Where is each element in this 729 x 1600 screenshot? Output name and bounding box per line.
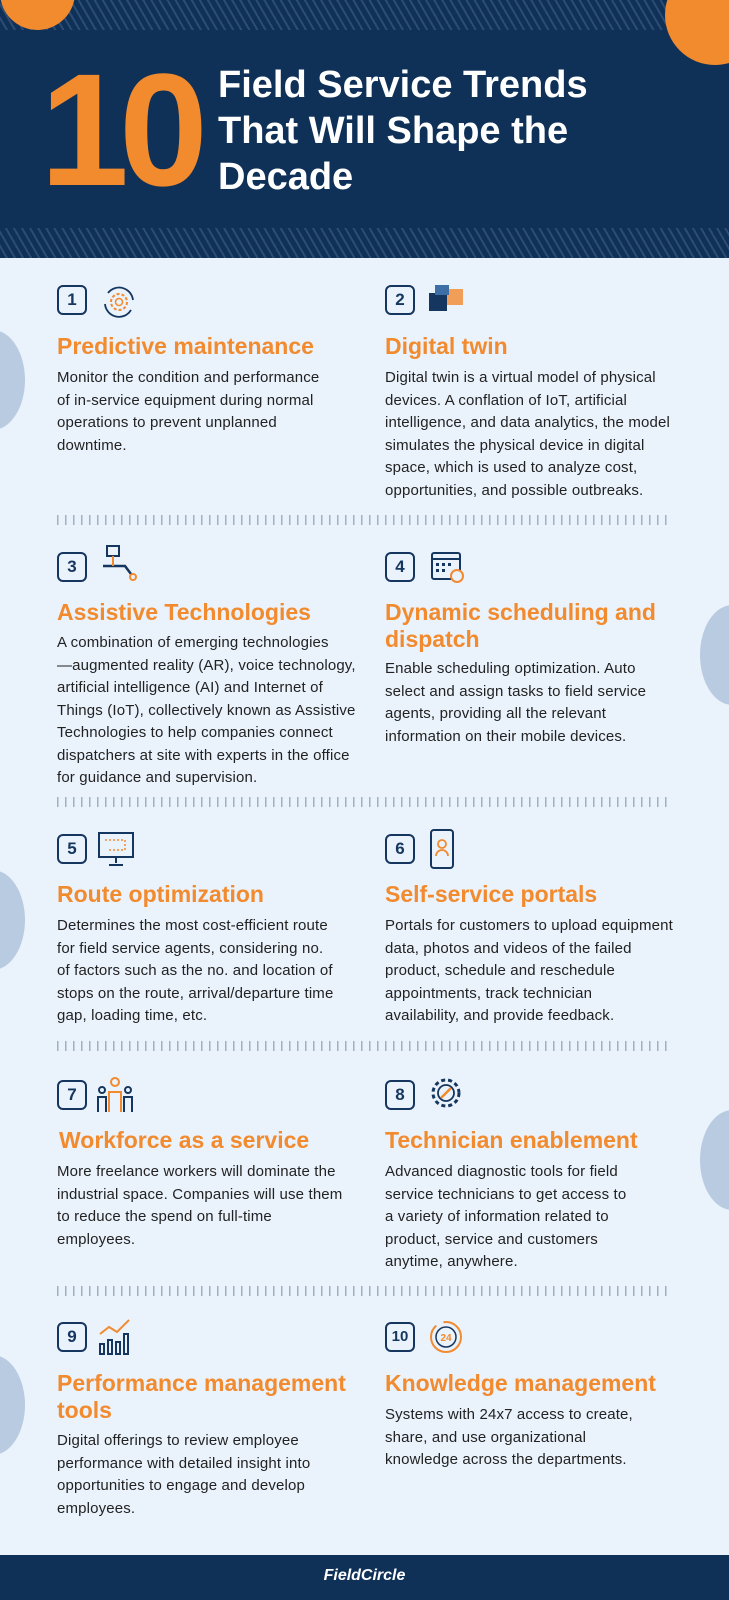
- item 6: product, schedule and reschedule: [385, 962, 615, 979]
- item 4: 4: [395, 557, 405, 576]
- icon: 24h: 24: [440, 1333, 452, 1344]
- item 4: agents, providing all the relevant: [385, 705, 606, 722]
- item 7: to reduce the spend on full-time: [57, 1208, 272, 1225]
- item 9: Digital offerings to review employee: [57, 1432, 299, 1449]
- item 1: 1: [67, 290, 77, 309]
- item 1: Monitor the condition and performance: [57, 369, 319, 386]
- item 6: Self-service portals: [385, 881, 597, 907]
- icon: route board: [98, 832, 134, 866]
- item 10: Knowledge management: [385, 1370, 656, 1396]
- item 9: [57, 1319, 346, 1516]
- item 1: downtime.: [57, 436, 127, 454]
- icon: 24h: [430, 1321, 462, 1353]
- item 1: of in-service equipment during normal: [57, 392, 314, 408]
- icon: robot arm: [103, 545, 137, 581]
- footer logo: FieldCircle: [324, 1567, 405, 1584]
- item 2: intelligence, and data analytics, the model: [385, 414, 670, 431]
- item 5: Determines the most cost-efficient route: [57, 917, 328, 934]
- item 7: [57, 1077, 342, 1248]
- icon: bar chart: [99, 1319, 130, 1355]
- item 7: Workforce as a service: [59, 1127, 309, 1153]
- icon: phone: [430, 829, 454, 869]
- item 6: Portals for customers to upload equipment: [385, 917, 673, 934]
- title: Field Service Trends: [218, 64, 588, 106]
- item 4: Enable scheduling optimization. Auto: [385, 660, 636, 677]
- item 6: appointments, track technician: [385, 984, 592, 1002]
- text: for guidance and supervision.: [57, 769, 257, 786]
- item 7: 7: [67, 1085, 77, 1104]
- item 9: 9: [67, 1327, 77, 1346]
- item 3: dispatchers at site with experts in the office: [57, 746, 350, 764]
- icon: calendar: [431, 552, 464, 583]
- item 5: 5: [67, 839, 77, 858]
- item 4: information on their mobile devices.: [385, 728, 626, 744]
- item 2: devices. A conflation of IoT, artificial: [385, 392, 627, 408]
- item 8: anytime, anywhere.: [385, 1253, 518, 1270]
- item 3: 3: [67, 557, 77, 576]
- item 8: Advanced diagnostic tools for field: [385, 1163, 618, 1180]
- icon: cubes: [429, 285, 463, 311]
- item 4: [385, 552, 656, 744]
- title: Decade: [218, 156, 353, 198]
- item 9: performance with detailed insight into: [57, 1454, 310, 1472]
- item 3: —augmented reality (AR), voice technology,: [57, 656, 356, 674]
- decorative orange circles: [0, 0, 75, 30]
- text: gap, loading time, etc.: [57, 1007, 207, 1024]
- item 9: tools: [57, 1397, 112, 1423]
- text: availability, and provide feedback.: [385, 1007, 614, 1024]
- item 5: for field service agents, considering no.: [57, 940, 323, 956]
- item 5: [57, 832, 333, 1024]
- item 1: operations to prevent unplanned: [57, 414, 277, 431]
- title: [218, 64, 588, 198]
- text: employees.: [57, 1230, 135, 1248]
- item 3: Technologies to help companies connect: [57, 724, 333, 741]
- item 9: Performance management: [57, 1370, 346, 1396]
- big number: 10: [40, 40, 198, 219]
- item 9: opportunities to engage and develop: [57, 1477, 305, 1494]
- title: That Will Shape the: [218, 110, 568, 152]
- item 3: [57, 545, 356, 786]
- item 7: industrial space. Companies will use them: [57, 1186, 342, 1202]
- item 4: Dynamic scheduling and: [385, 599, 656, 625]
- header: [0, 0, 729, 258]
- item 10: Systems with 24x7 access to create,: [385, 1406, 633, 1423]
- item 8: Technician enablement: [385, 1127, 638, 1153]
- item 8: product, service and customers: [385, 1230, 598, 1248]
- item 5: Route optimization: [57, 881, 264, 907]
- item 1: [57, 285, 319, 454]
- item 4: dispatch: [385, 626, 480, 652]
- item 7: More freelance workers will dominate the: [57, 1163, 336, 1180]
- item 3: Assistive Technologies: [57, 599, 311, 625]
- item 1: Predictive maintenance: [57, 333, 314, 359]
- item 8: service technicians to get access to: [385, 1186, 626, 1202]
- item 2: simulates the physical device in digital: [385, 436, 644, 454]
- item 5: of factors such as the no. and location of: [57, 962, 333, 979]
- item 4: select and assign tasks to field service: [385, 682, 646, 700]
- item 2: 2: [395, 290, 405, 309]
- footer: [0, 1555, 729, 1600]
- item 3: artificial intelligence (AI) and Internet of: [57, 679, 323, 696]
- item 2: Digital twin is a virtual model of physical: [385, 369, 656, 386]
- item 2: [385, 285, 670, 498]
- item 6: [385, 829, 673, 1024]
- text: knowledge across the departments.: [385, 1451, 627, 1468]
- item 10: share, and use organizational: [385, 1428, 586, 1446]
- icon: gear wrench: [432, 1078, 460, 1108]
- side circles: [0, 330, 25, 430]
- item 2: space, which is used to analyze cost,: [385, 459, 637, 476]
- item 3: A combination of emerging technologies: [57, 634, 329, 651]
- item 9: employees.: [57, 1500, 135, 1516]
- item 6: 6: [395, 839, 405, 858]
- icon: workers: [97, 1077, 133, 1112]
- item 8: [385, 1078, 638, 1270]
- item 5: stops on the route, arrival/departure time: [57, 984, 333, 1002]
- item 6: data, photos and videos of the failed: [385, 940, 632, 956]
- item 2: Digital twin: [385, 333, 508, 359]
- item 8: a variety of information related to: [385, 1208, 609, 1225]
- item 3: Things (IoT), collectively known as Assistive: [57, 702, 356, 718]
- item 8: 8: [395, 1085, 405, 1104]
- item 10: 10: [392, 1328, 408, 1345]
- icon: gear: [104, 286, 134, 318]
- item 2: opportunities, and possible outbreaks.: [385, 482, 643, 498]
- item 10: [385, 1321, 656, 1468]
